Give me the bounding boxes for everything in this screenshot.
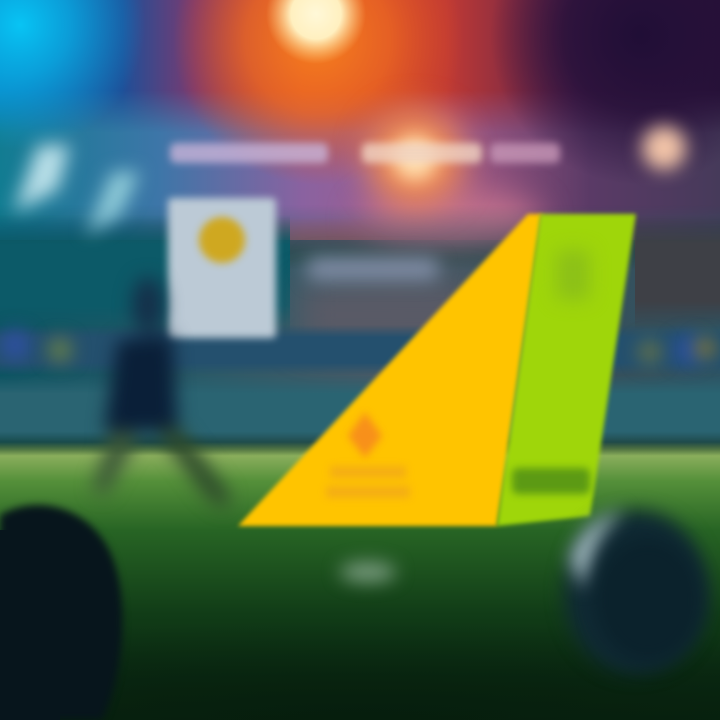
green wedge icon xyxy=(556,250,590,300)
blurred white pitch mark xyxy=(340,562,396,582)
icon: yellow coin xyxy=(199,217,245,263)
player silhouette xyxy=(92,277,230,510)
white flag shapes at left xyxy=(14,145,140,235)
grass field xyxy=(0,442,720,720)
dark lower vignette xyxy=(0,620,720,720)
background: sky and stadium lights xyxy=(0,0,720,260)
blurred yellow wedge text xyxy=(326,466,410,498)
football: right xyxy=(564,510,708,674)
football: left xyxy=(0,505,122,720)
blurred title text bar xyxy=(170,143,560,163)
panel: white card with yellow badge xyxy=(168,198,276,338)
green wedge segment xyxy=(497,214,636,526)
icon: orange marker xyxy=(348,412,382,458)
stadium stands background xyxy=(0,205,720,465)
yellow wedge segment xyxy=(238,214,542,526)
green wedge value xyxy=(512,468,590,494)
yellow and green wedge chart xyxy=(238,214,636,526)
blurred subtitle text xyxy=(308,258,438,280)
spotlight glows xyxy=(266,0,686,206)
